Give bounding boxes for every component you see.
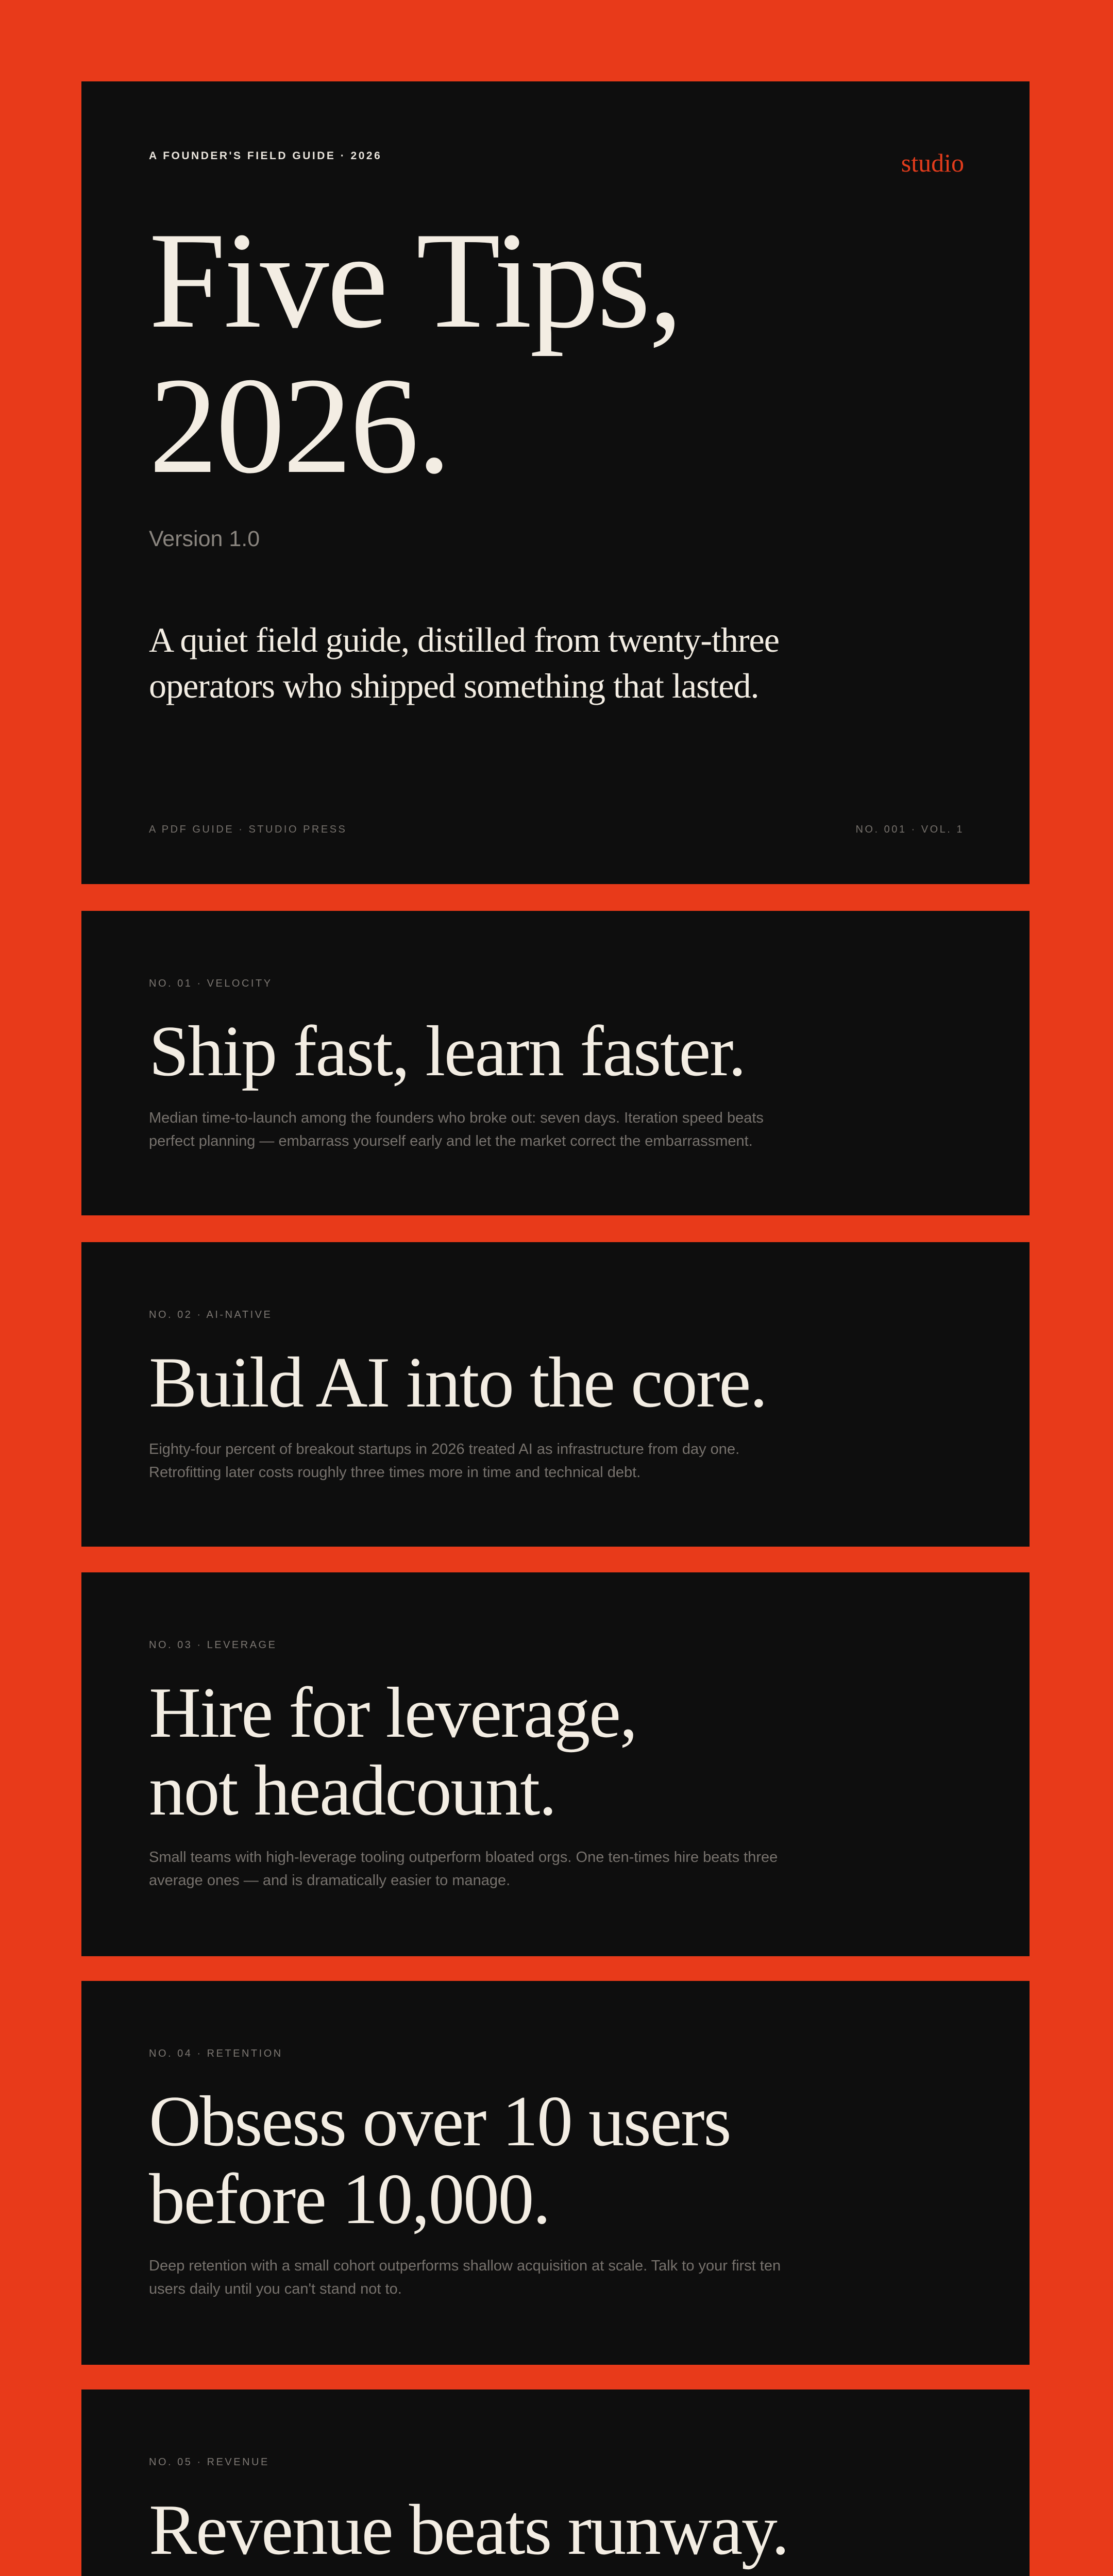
title: Five Tips, — [149, 204, 681, 357]
subtitle: operators who shipped something that lasted. — [149, 666, 759, 705]
body: Deep retention with a small cohort outperforms shallow acquisition at scale. Talk to your first ten users daily until you can't stand not to. — [149, 2258, 781, 2297]
title — [149, 204, 681, 502]
label: NO. 03 · LEVERAGE — [149, 1639, 277, 1651]
subtitle — [149, 620, 779, 705]
heading — [149, 2081, 730, 2239]
title: 2026. — [149, 349, 449, 502]
panel: tip 4 — [81, 1981, 1030, 2365]
heading: Obsess over 10 users — [149, 2081, 730, 2161]
label: NO. 04 · RETENTION — [149, 2048, 283, 2059]
subtitle: A quiet field guide, distilled from twenty-three — [149, 620, 779, 659]
body: Eighty-four percent of breakout startups in 2026 treated AI as infrastructure from day one. Retrofitting later costs roughly three times more in time and technical debt. — [149, 1441, 739, 1481]
top label: A FOUNDER'S FIELD GUIDE · 2026 — [149, 150, 382, 162]
footer left: A PDF GUIDE · STUDIO PRESS — [149, 824, 347, 835]
panel: tip 1 — [81, 911, 1030, 1215]
heading: not headcount. — [149, 1751, 555, 1831]
label: NO. 01 · VELOCITY — [149, 978, 273, 989]
label: NO. 05 · REVENUE — [149, 2456, 269, 2468]
panel: cover — [81, 81, 1030, 884]
logo: studio: studio — [901, 148, 964, 177]
label: NO. 02 · AI-NATIVE — [149, 1309, 272, 1320]
heading: Build AI into the core. — [149, 1343, 766, 1422]
heading: Ship fast, learn faster. — [149, 1011, 745, 1091]
panel: tip 3 — [81, 1572, 1030, 1956]
body: Median time-to-launch among the founders who broke out: seven days. Iteration speed beats perfect planning — embarrass yourself early and let the market correct the embarrassment. — [149, 1110, 764, 1149]
panel: tip 5 — [81, 2389, 1030, 2576]
footer right: NO. 001 · VOL. 1 — [855, 824, 964, 835]
heading: Revenue beats runway. — [149, 2490, 788, 2570]
heading — [149, 1673, 636, 1831]
version: Version 1.0 — [149, 527, 260, 551]
heading: Hire for leverage, — [149, 1673, 636, 1753]
body: Small teams with high-leverage tooling outperform bloated orgs. One ten-times hire beats three average ones — and is dramatically easier to manage. — [149, 1849, 778, 1889]
heading: before 10,000. — [149, 2159, 550, 2239]
panel: tip 2 — [81, 1242, 1030, 1547]
